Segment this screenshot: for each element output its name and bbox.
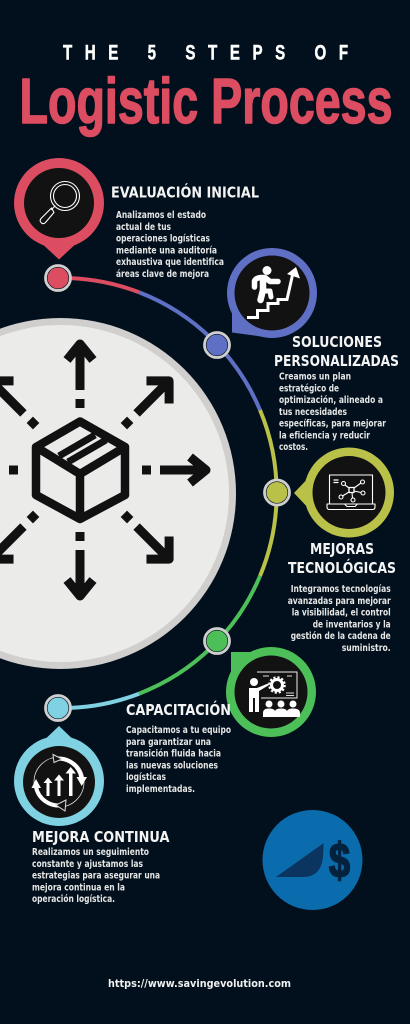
website url: https://www.savingevolution.com — [108, 977, 291, 990]
step 4 text — [126, 700, 231, 795]
step 3 text: suministro. — [342, 643, 391, 654]
icon: package box — [36, 422, 125, 519]
step 4 text: transición fluida hacia — [126, 748, 221, 760]
step 4 text: las nuevas soluciones — [126, 760, 218, 771]
step 1 text — [111, 182, 259, 280]
step 2 text: optimización, alineado a — [279, 395, 383, 406]
icon: presenter and audience — [249, 672, 300, 717]
step 3 text — [288, 540, 396, 654]
step 3 text: de inventarios y la — [313, 619, 391, 630]
step 2 text: Creamos un plan — [279, 372, 351, 382]
step 1 text: actual de tus — [116, 222, 171, 233]
step 2 text: SOLUCIONES — [292, 333, 382, 351]
pin 2: stairs — [227, 248, 317, 338]
step 4 text: Capacitamos a tu equipo — [126, 725, 231, 736]
step 3 text: MEJORAS — [310, 540, 374, 558]
pin 3: laptop network — [294, 448, 394, 538]
step 1 text: exhaustiva que identifica — [116, 257, 224, 268]
step 2 text: estratégico de — [279, 383, 339, 394]
step 1 text: áreas clave de mejora — [116, 269, 209, 280]
step 2 text: tus necesidades — [279, 407, 347, 418]
step 5 text: MEJORA CONTINUA — [32, 828, 170, 846]
timeline arc — [58, 278, 277, 708]
step 5 text: constante y ajustamos las — [32, 859, 143, 870]
icon: laptop with network — [327, 475, 375, 510]
step 4 text: CAPACITACIÓN — [126, 700, 231, 719]
step 4 text: para garantizar una — [126, 737, 211, 748]
logo: $ — [329, 835, 350, 888]
pin 5: continuous improvement — [14, 726, 104, 826]
step 2 text: específicas, para mejorar — [279, 418, 386, 430]
step 2 text: la eficiencia y reducir — [279, 430, 370, 441]
step 5 text: mejora continua en la — [32, 882, 125, 893]
step 4 text: implementadas. — [126, 784, 195, 795]
icon: person climbing stairs — [247, 266, 300, 318]
step 4 text: logísticas — [126, 772, 166, 783]
central circle with package icon — [0, 318, 236, 669]
step 1 text: EVALUACIÓN INICIAL — [111, 182, 259, 202]
timeline nodes — [46, 266, 290, 720]
arrows — [0, 344, 206, 596]
step 1 text: mediante una auditoría — [116, 245, 217, 256]
pin 4: training — [226, 647, 316, 737]
icon: magnifying glass — [40, 182, 80, 224]
step 5 text: operación logística. — [32, 894, 115, 905]
step 5 text — [32, 828, 170, 905]
title: THE 5 STEPS OF — [63, 40, 348, 64]
step 2 text: costos. — [279, 442, 308, 453]
pin 1: magnifier — [14, 158, 104, 260]
step 5 text: Realizamos un seguimiento — [32, 847, 149, 858]
step 1 text: Analizamos el estado — [116, 210, 206, 221]
logo — [262, 810, 362, 910]
step 1 text: operaciones logísticas — [116, 234, 210, 244]
step 5 text: estrategias para asegurar una — [32, 870, 160, 882]
step 2 text — [274, 333, 399, 453]
icon: cycle with growth arrows — [32, 754, 87, 811]
